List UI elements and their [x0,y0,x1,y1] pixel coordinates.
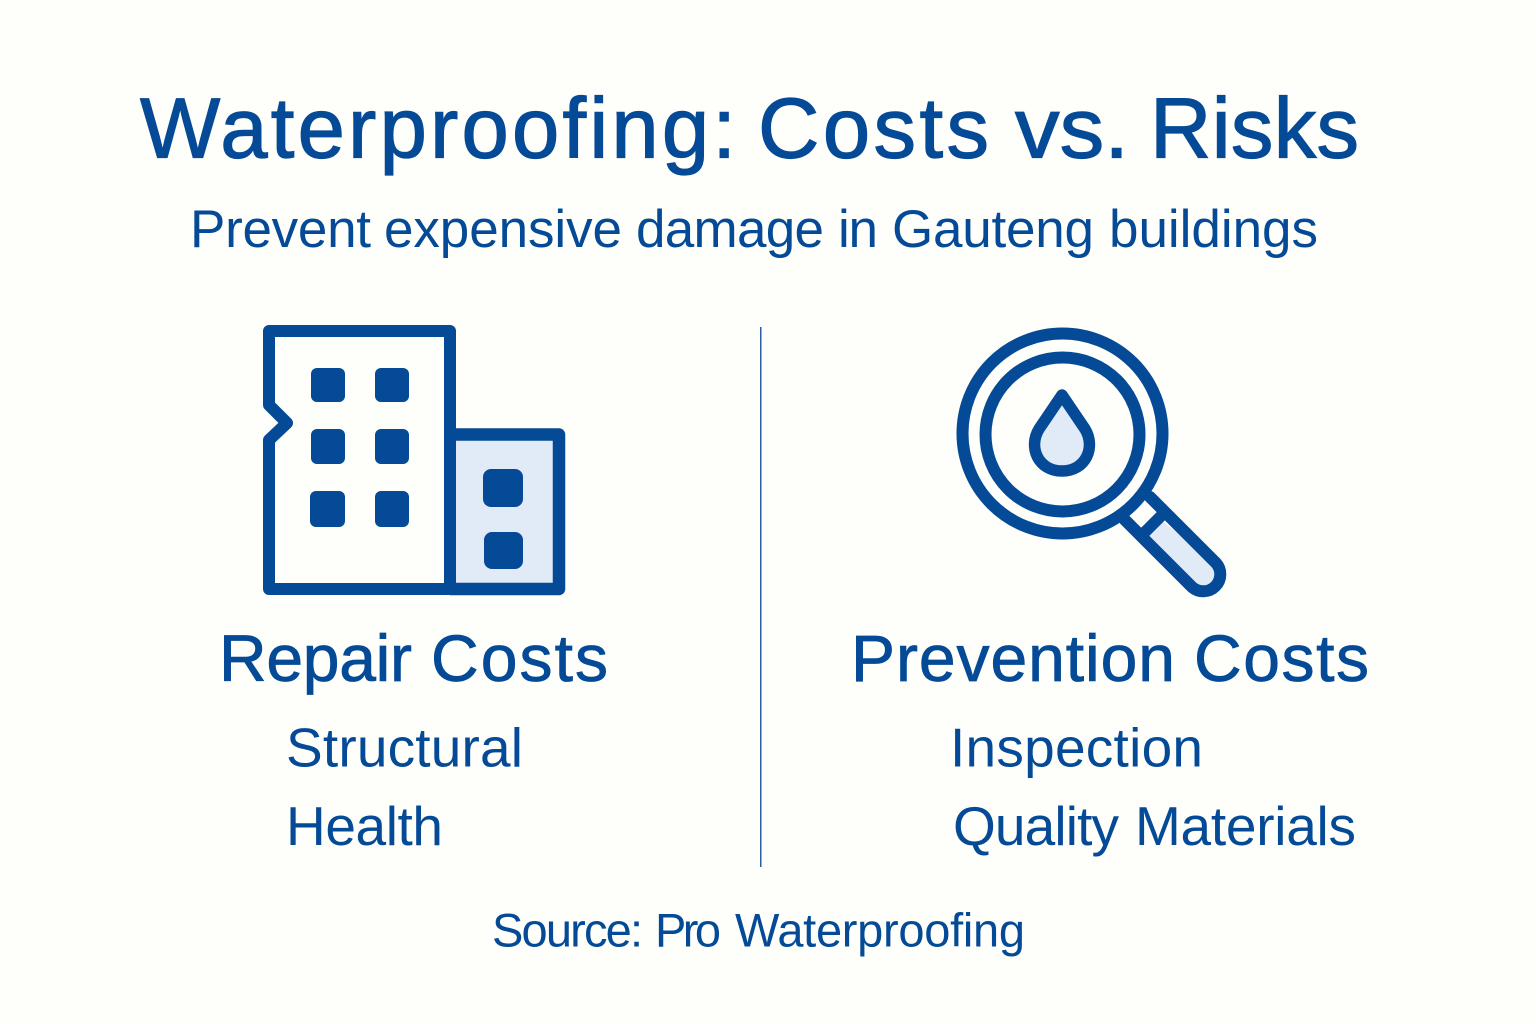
source note: Waterproofing [735,904,1025,956]
source note [492,904,1025,956]
heading: prevention costs [851,621,1369,695]
subtitle: in [838,200,878,259]
heading: prevention costs: Prevention [851,621,1175,695]
list item: quality materials [953,795,1356,857]
source note: Source: [492,904,643,956]
heading: repair costs: Costs [431,621,608,695]
list item: inspection: Inspection [950,716,1203,778]
title: vs. [1015,82,1129,176]
heading: repair costs [219,621,608,695]
subtitle: Gauteng [892,200,1094,259]
panel: repair costs [219,331,608,857]
list item: structural: Structural [286,716,523,778]
heading: prevention costs: Costs [1194,621,1369,695]
title: Waterproofing: [140,82,736,176]
list item: quality materials: Quality [953,795,1120,857]
subtitle [190,200,1318,259]
icon: damaged building [269,331,559,589]
icon: magnifying glass with water drop [962,334,1220,591]
title [140,82,1359,176]
subtitle: buildings [1109,200,1318,259]
panel: prevention costs [851,334,1369,857]
heading: repair costs: Repair [219,621,412,695]
subtitle: expensive [384,200,622,259]
title: Risks [1150,82,1359,176]
divider [760,327,762,867]
list item: health: Health [286,795,443,857]
subtitle: Prevent [190,200,371,259]
title: Costs [758,82,989,176]
subtitle: damage [636,200,824,259]
list item: quality materials: Materials [1135,795,1356,857]
source note: Pro [655,904,721,956]
